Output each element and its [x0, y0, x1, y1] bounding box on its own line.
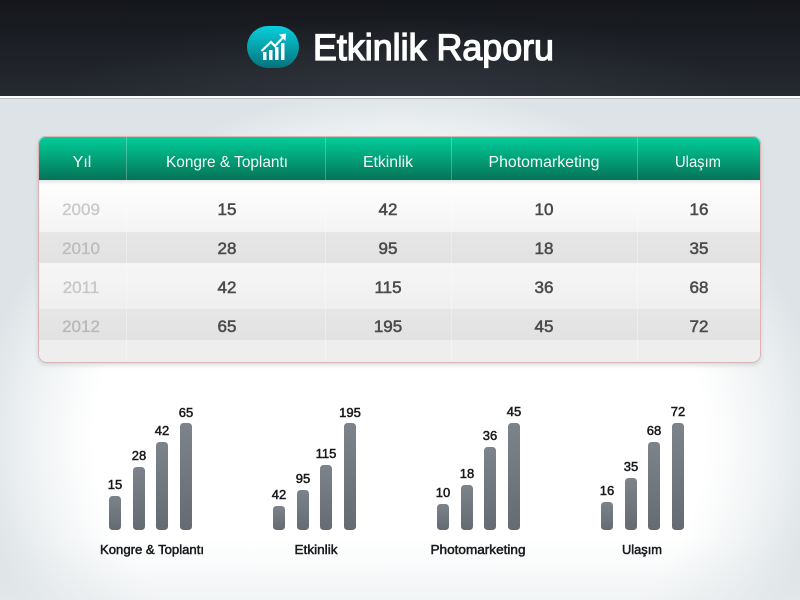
- bar chart: Ulaşım: 68: [647, 423, 661, 438]
- row 2009: 16: [690, 200, 708, 219]
- bar chart: Etkinlik: 195: [339, 405, 361, 420]
- bar chart: Etkinlik: Etkinlik: [294, 542, 338, 557]
- row 2012: [62, 317, 708, 336]
- row 2011: 68: [690, 278, 708, 297]
- row 2012: 2012: [62, 317, 100, 336]
- bar chart: Photomarketing: Photomarketing: [430, 542, 526, 557]
- table header row: Kongre & Toplantı: [166, 154, 288, 171]
- bar chart: Kongre & Toplantı: 28: [132, 448, 146, 463]
- bar chart: Ulaşım: 35: [624, 459, 638, 474]
- table rows: [39, 182, 760, 340]
- row 2011: 36: [535, 278, 553, 297]
- bar chart: Photomarketing: 36: [483, 428, 497, 443]
- row 2010: [62, 239, 708, 258]
- table header row: Photomarketing: [488, 154, 600, 171]
- icon: rising chart badge: [247, 26, 299, 68]
- bar chart: Kongre & Toplantı: Kongre & Toplantı: [100, 542, 204, 557]
- table header row: Ulaşım: [675, 154, 721, 171]
- row 2011: 42: [218, 278, 236, 297]
- row 2011: [63, 278, 708, 297]
- bar chart: Ulaşım: 72: [671, 404, 685, 419]
- bar chart: Etkinlik: 42: [272, 487, 286, 502]
- bar chart: Photomarketing: 10: [436, 485, 450, 500]
- bar chart: Photomarketing: 45: [507, 404, 521, 419]
- row 2010: 28: [218, 239, 236, 258]
- row 2010: 2010: [62, 239, 100, 258]
- row 2010: 35: [690, 239, 708, 258]
- bar chart: Photomarketing: 18: [460, 466, 474, 481]
- row 2012: 65: [218, 317, 236, 336]
- row 2010: 95: [379, 239, 397, 258]
- table shadow: [38, 139, 761, 365]
- bar chart: Ulaşım: Ulaşım: [622, 542, 662, 557]
- row 2009: 42: [379, 200, 397, 219]
- bar chart: Etkinlik: 95: [296, 471, 310, 486]
- row 2011: 2011: [63, 278, 99, 297]
- bar chart: Kongre & Toplantı: 15: [108, 477, 122, 492]
- header band: [0, 0, 800, 99]
- bar chart: Photomarketing: [430, 404, 526, 557]
- row 2012: 45: [535, 317, 553, 336]
- bar chart: Ulaşım: [600, 404, 685, 557]
- row 2010: 18: [535, 239, 553, 258]
- table header row: Yıl: [73, 154, 91, 171]
- row 2012: 195: [374, 317, 402, 336]
- table header row: Etkinlik: [363, 154, 414, 171]
- row 2009: 10: [535, 200, 553, 219]
- bar chart: Kongre & Toplantı: 65: [179, 405, 193, 420]
- table header row: [38, 136, 761, 180]
- bar chart: Kongre & Toplantı: [100, 405, 204, 557]
- row 2012: 72: [690, 317, 708, 336]
- row 2009: [62, 200, 708, 219]
- bar chart: Kongre & Toplantı: 42: [155, 423, 169, 438]
- title: Etkinlik Raporu: [313, 27, 554, 68]
- row 2009: 15: [218, 200, 236, 219]
- panel: data table: [38, 136, 761, 363]
- row 2009: 2009: [62, 200, 100, 219]
- bar chart: Ulaşım: 16: [600, 483, 614, 498]
- row 2011: 115: [374, 278, 402, 297]
- bar chart: Etkinlik: 115: [316, 446, 336, 461]
- bar chart: Etkinlik: [272, 405, 361, 557]
